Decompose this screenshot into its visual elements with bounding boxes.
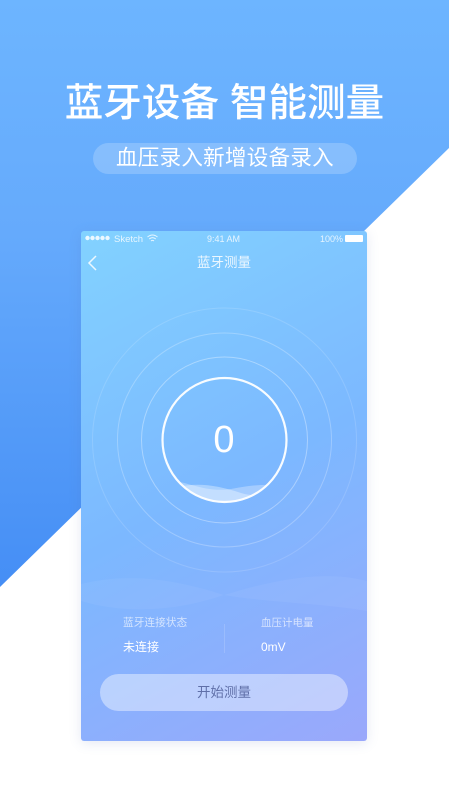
value: 0mV: 0mV — [261, 640, 286, 654]
battery: 100% — [320, 234, 343, 244]
label: meter voltage: 血压计电量 — [261, 616, 314, 628]
gauge value: 0 — [213, 419, 235, 461]
carrier: Sketch — [114, 234, 143, 244]
gauge rings and wave — [92, 308, 357, 572]
phone screen panel — [81, 231, 367, 741]
screen title: 蓝牙测量 — [197, 255, 251, 270]
subtitle pill — [93, 143, 357, 174]
back arrow icon — [88, 256, 96, 270]
status bar — [85, 234, 363, 244]
battery — [320, 234, 363, 244]
title: 蓝牙设备 智能测量 — [65, 82, 384, 125]
start button — [100, 674, 348, 711]
signal dots — [85, 236, 110, 240]
wifi icon — [147, 234, 158, 242]
start button: 开始测量 — [197, 685, 251, 700]
divider — [224, 624, 225, 653]
clock: 9:41 AM — [207, 234, 240, 244]
value: not connected: 未连接 — [123, 640, 159, 654]
label: bluetooth status: 蓝牙连接状态 — [123, 616, 187, 628]
subtitle pill: 血压录入新增设备录入 — [116, 146, 334, 170]
